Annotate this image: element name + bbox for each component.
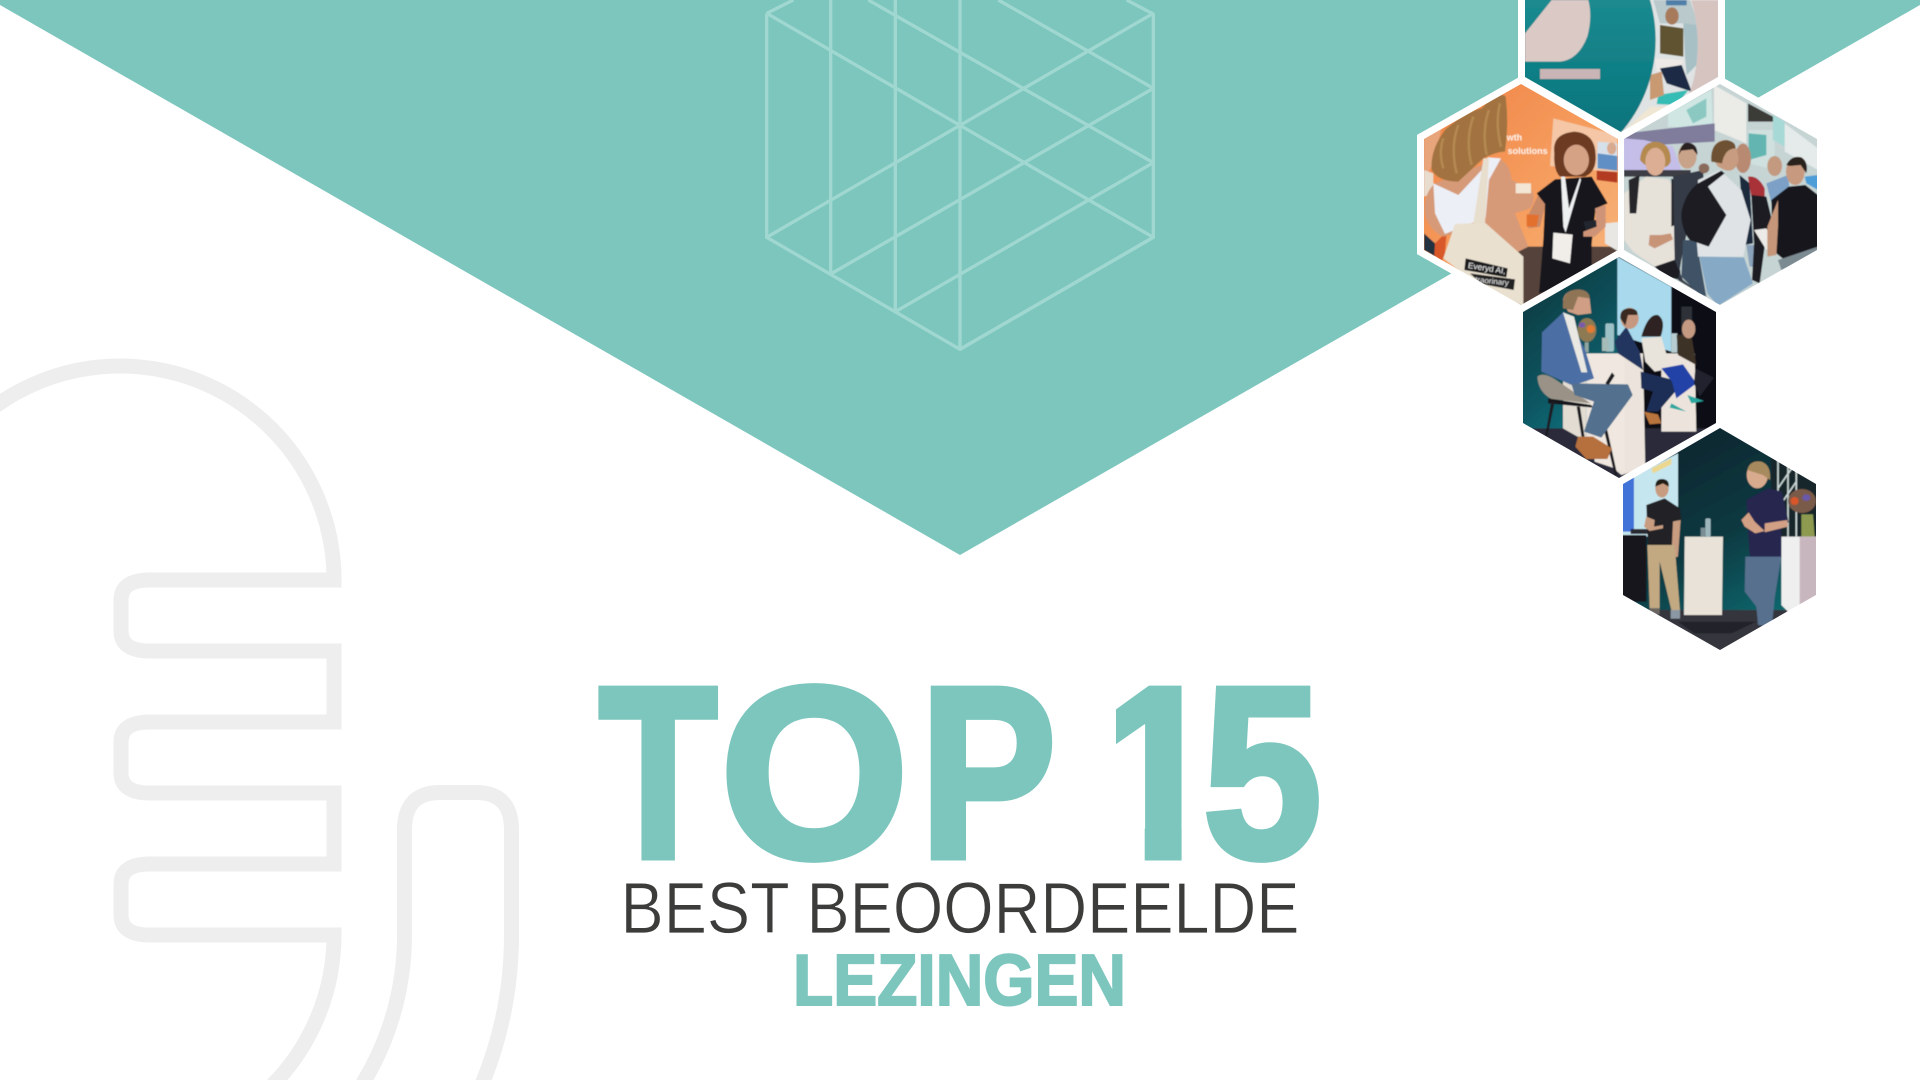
heading: TOP 15	[598, 636, 1321, 909]
photo hexagon: woman at orange stand	[1424, 84, 1618, 305]
microphone line art	[0, 366, 512, 1080]
hexagon white outlines	[1424, 0, 1817, 650]
isometric cube line art	[767, 0, 1153, 349]
photo hexagon: woman at orange stand: Everyd AI,	[1467, 260, 1506, 276]
photo hexagon: woman at orange stand: solutions	[1508, 146, 1548, 156]
photo hexagon: two speakers on stage	[1618, 425, 1823, 655]
photo hexagon: woman at orange stand: wth	[1506, 133, 1522, 143]
heading: TOP 15: O	[720, 636, 909, 909]
heading: TOP 15: 5	[1202, 636, 1321, 909]
photo hexagon: panel discussion on stage	[1518, 255, 1723, 485]
photo hexagon: woman at orange stand: traorinary	[1475, 275, 1509, 288]
heading: TOP 15: P	[920, 636, 1056, 909]
heading: TOP 15: T	[599, 636, 717, 909]
heading: LEZINGEN: LEZINGEN	[793, 941, 1126, 1021]
photo hexagon: crowd on exhibition floor	[1618, 80, 1823, 310]
teal chevron background	[0, 0, 1920, 555]
photo hexagon: brand graphic with audience	[1525, 0, 1718, 132]
heading: TOP 15: 1	[1097, 636, 1219, 909]
heading: BEST BEOORDEELDE: BEST BEOORDEELDE	[620, 869, 1300, 949]
